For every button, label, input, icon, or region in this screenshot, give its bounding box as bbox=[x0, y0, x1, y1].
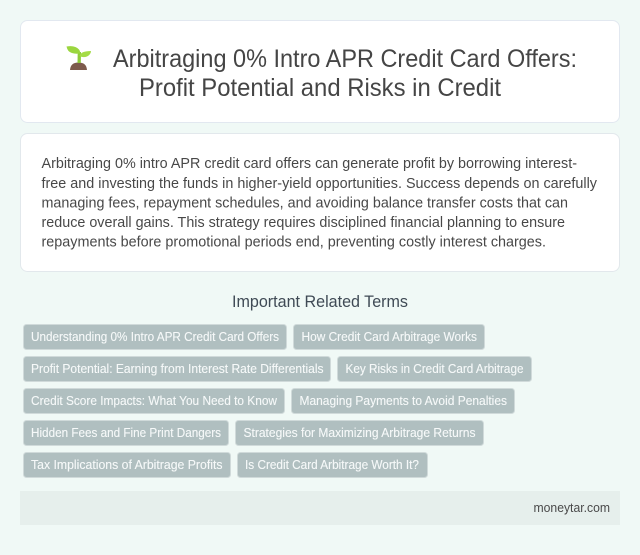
tag: strategies: Strategies for Maximizing Arbitrage Returns bbox=[244, 426, 476, 440]
tag: strategies bbox=[236, 420, 484, 446]
tag: tax implications: Tax Implications of Arbitrage Profits bbox=[31, 458, 222, 472]
tag: profit potential: Profit Potential: Earning from Interest Rate Differentials bbox=[31, 362, 324, 376]
tag: managing payments bbox=[292, 388, 514, 414]
footer bbox=[20, 491, 620, 525]
text block: description: free and investing the funds in higher-yield opportunities. Success depends on carefully bbox=[42, 176, 598, 192]
text block: description: reduce overall gains. This strategy requires disciplined financial planning to ensure bbox=[42, 215, 565, 231]
title: Profit Potential and Risks in Credit bbox=[139, 75, 501, 102]
tag: understanding offers: Understanding 0% Intro APR Credit Card Offers bbox=[31, 330, 279, 344]
text block: description: repayments before promotional periods end, preventing costly interest charges. bbox=[42, 234, 546, 250]
tag: key risks bbox=[338, 356, 532, 382]
footer: moneytar.com bbox=[534, 501, 610, 515]
tag: hidden fees: Hidden Fees and Fine Print Dangers bbox=[31, 426, 221, 440]
tag: credit score impacts: Credit Score Impacts: What You Need to Know bbox=[31, 394, 278, 408]
tag: tax implications bbox=[24, 452, 230, 478]
tag: hidden fees bbox=[24, 420, 228, 446]
tag: understanding offers bbox=[24, 324, 286, 350]
text block: description bbox=[42, 156, 598, 250]
tag: key risks: Key Risks in Credit Card Arbitrage bbox=[346, 362, 524, 376]
icon: seedling bbox=[66, 46, 91, 70]
title bbox=[113, 46, 577, 102]
panel: header card bbox=[20, 20, 620, 122]
tag: how arbitrage works: How Credit Card Arbitrage Works bbox=[302, 330, 477, 344]
tag: credit score impacts bbox=[24, 388, 284, 414]
heading: related terms: Important Related Terms bbox=[232, 293, 408, 311]
tag: managing payments: Managing Payments to Avoid Penalties bbox=[300, 394, 507, 408]
tag list: related terms bbox=[24, 324, 532, 478]
text block: description: Arbitraging 0% intro APR credit card offers can generate profit by borrowing interest- bbox=[42, 156, 577, 172]
text block: description: managing fees, repayment schedules, and avoiding balance transfer costs that can bbox=[42, 196, 568, 212]
title: Arbitraging 0% Intro APR Credit Card Offers: bbox=[113, 46, 577, 73]
tag: worth it bbox=[238, 452, 428, 478]
tag: how arbitrage works bbox=[294, 324, 484, 350]
tag: worth it: Is Credit Card Arbitrage Worth It? bbox=[245, 458, 419, 472]
tag: profit potential bbox=[24, 356, 330, 382]
panel: description card bbox=[20, 134, 620, 272]
